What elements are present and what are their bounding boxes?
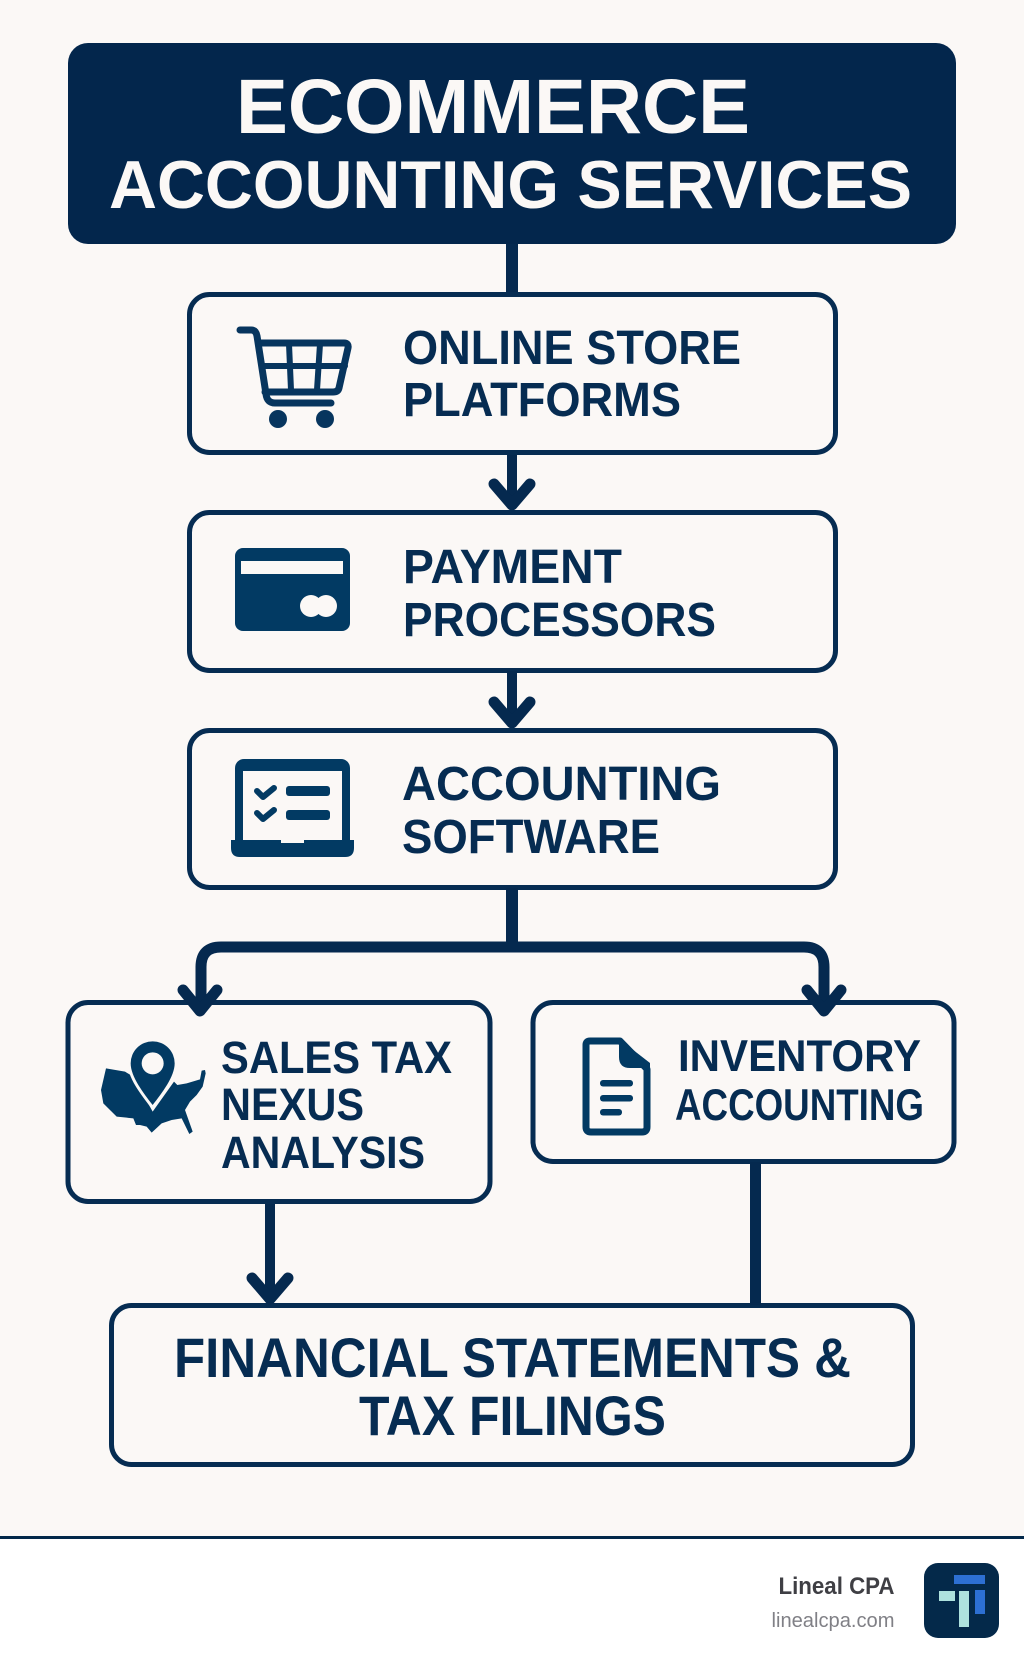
- label: sales tax nexus analysis: [221, 1032, 452, 1178]
- icon: map with location pin: [101, 1041, 206, 1134]
- icon: document: [586, 1039, 650, 1132]
- title banner: ECOMMERCE: [236, 64, 750, 150]
- label: payment processors: PROCESSORS: [403, 594, 716, 647]
- arrow: branching connector from accounting software: [183, 888, 841, 1011]
- label: financial statements and tax filings: [174, 1326, 851, 1447]
- footer: [0, 1536, 1024, 1666]
- label: accounting software: ACCOUNTING: [402, 758, 721, 811]
- arrow: online store to payment processors: [494, 455, 530, 505]
- label: sales tax nexus analysis: NEXUS: [221, 1079, 364, 1130]
- label: payment processors: PAYMENT: [403, 541, 622, 594]
- panel: online store platforms: [190, 294, 836, 452]
- panel: accounting software: [190, 730, 836, 888]
- label: online store platforms: [403, 322, 741, 427]
- arrow: sales tax to financial statements: [252, 1204, 288, 1299]
- label: financial statements and tax filings: TAX FILINGS: [359, 1384, 666, 1447]
- label: accounting software: [402, 758, 721, 864]
- brand name: Lineal CPA: [778, 1573, 894, 1600]
- connector: inventory to financial statements: [750, 1162, 761, 1305]
- label: inventory accounting: ACCOUNTING: [675, 1081, 924, 1130]
- label: sales tax nexus analysis: SALES TAX: [221, 1032, 452, 1083]
- panel: payment processors: [190, 512, 836, 670]
- icon: shopping cart: [240, 330, 348, 428]
- label: inventory accounting: INVENTORY: [678, 1032, 921, 1081]
- label: online store platforms: PLATFORMS: [403, 374, 681, 427]
- panel: sales tax nexus analysis: [68, 1002, 490, 1202]
- connector: title to online store: [506, 240, 518, 294]
- label: inventory accounting: [675, 1032, 924, 1130]
- label: payment processors: [403, 541, 716, 647]
- title banner: [68, 43, 956, 244]
- label: accounting software: SOFTWARE: [402, 811, 660, 864]
- label: sales tax nexus analysis: ANALYSIS: [221, 1127, 425, 1178]
- title banner: ACCOUNTING SERVICES: [109, 147, 912, 223]
- icon: credit card: [235, 548, 350, 631]
- label: online store platforms: ONLINE STORE: [403, 322, 741, 375]
- icon: lineal cpa logo: [924, 1563, 999, 1638]
- brand url: linealcpa.com: [772, 1610, 894, 1632]
- arrow: payment processors to accounting software: [494, 671, 530, 723]
- icon: laptop checklist: [231, 759, 354, 857]
- panel: financial statements and tax filings: [112, 1306, 912, 1464]
- panel: inventory accounting: [533, 1002, 954, 1162]
- label: financial statements and tax filings: FINANCIAL STATEMENTS &: [174, 1326, 851, 1389]
